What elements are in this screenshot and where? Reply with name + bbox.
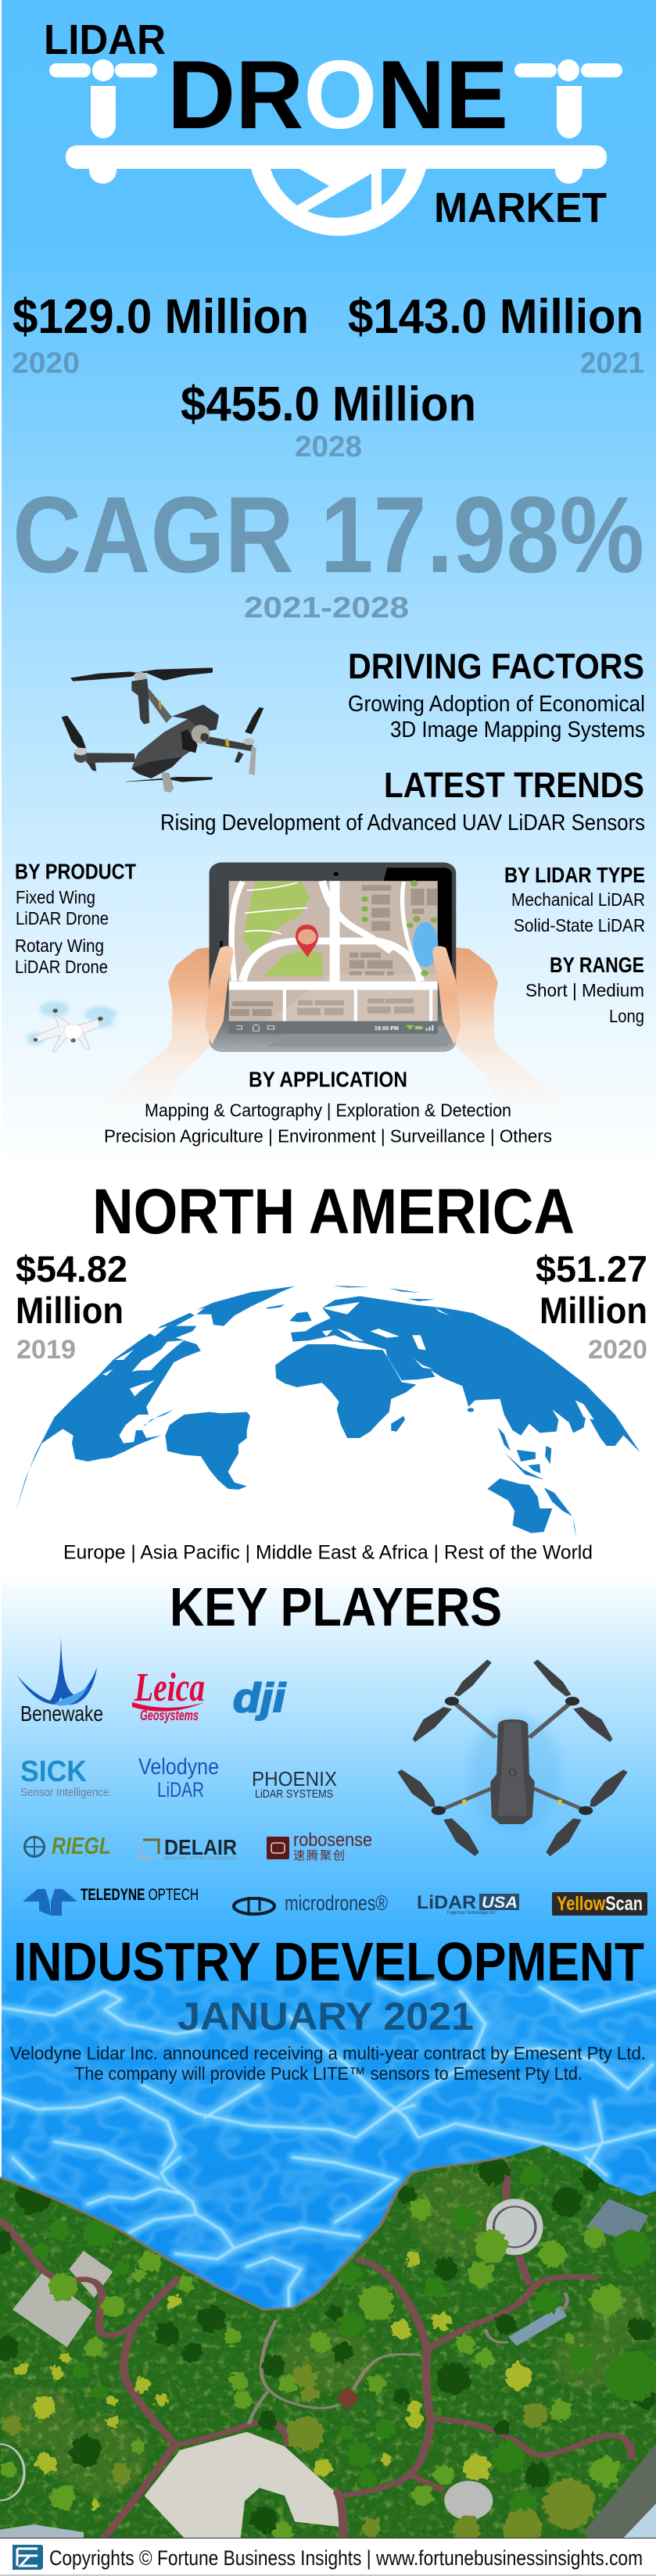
trees	[0, 2156, 656, 2546]
logo: Teledyne Optech	[23, 1886, 199, 1916]
icon: Fortune Business Insights logo	[13, 2545, 43, 2570]
tablet status bar: 19:00 PM	[375, 1025, 399, 1032]
logo: RIEGL	[23, 1832, 111, 1859]
stat: 2019 value: $54.82	[16, 1248, 127, 1290]
item: rotary wing: Rotary Wing	[15, 936, 104, 956]
logo: RoboSense: robosense	[293, 1830, 372, 1851]
logo: Delair: DELAIR	[164, 1835, 237, 1859]
footer bar	[0, 2538, 656, 2576]
date heading: january 2021: JANUARY 2021	[177, 1995, 474, 2038]
logo: Teledyne Optech: TELEDYNE OPTECH	[81, 1886, 199, 1904]
logo: Leica Geosystems	[132, 1665, 205, 1723]
world map globe	[16, 1286, 640, 1538]
drone top view illustration	[397, 1659, 628, 1856]
stat: 2020 year: 2020	[12, 347, 80, 380]
item: mechanical lidar: Mechanical LiDAR	[511, 889, 645, 910]
logo: YellowScan: YellowScan	[557, 1893, 643, 1915]
logo: LiDAR USA	[417, 1892, 519, 1916]
aerial photo: park island	[0, 2141, 656, 2546]
stat: 2020 value: $51.27	[536, 1248, 647, 1290]
park paths	[0, 2165, 632, 2538]
title word: MARKET: MARKET	[434, 184, 607, 231]
key players section	[17, 1576, 647, 1916]
by application segment	[104, 1068, 552, 1147]
logo: Velodyne LiDAR: LiDAR	[157, 1778, 204, 1801]
regional section: north america	[16, 1176, 647, 1563]
logo: Velodyne LiDAR	[138, 1755, 219, 1801]
stat: 2020 unit: Million	[539, 1290, 647, 1331]
sea wall	[0, 2157, 506, 2309]
other regions list: Europe | Asia Pacific | Middle East & Africa | Rest of the World	[63, 1541, 593, 1563]
logo: SICK: Sensor Intelligence.	[20, 1786, 112, 1799]
icon: right arm and hand	[444, 947, 596, 1123]
map screen	[229, 880, 438, 1021]
logo: RoboSense	[267, 1830, 372, 1862]
logo: RoboSense: 速腾聚创	[293, 1849, 345, 1862]
logo: SICK	[20, 1755, 112, 1799]
stat: 2019 year: 2019	[16, 1335, 76, 1365]
latest trends text	[160, 765, 645, 835]
plazas and buildings	[0, 2199, 656, 2538]
item: fixed wing line 2: LiDAR Drone	[16, 908, 109, 928]
stat: 2021 value: $143.0 Million	[348, 290, 643, 344]
icon: small white drone	[27, 1001, 117, 1053]
stat: 2028 year: 2028	[295, 431, 362, 463]
left white edge strip	[0, 0, 2, 2177]
by product segment	[15, 860, 136, 977]
logo: Benewake	[17, 1636, 103, 1726]
logo: LiDAR USA: USA	[482, 1894, 518, 1912]
logo: Velodyne LiDAR: Velodyne	[138, 1755, 219, 1780]
logo: LiDAR USA: LiDAR	[417, 1892, 476, 1913]
heading: north america: NORTH AMERICA	[92, 1176, 575, 1247]
stat: 2028 value: $455.0 Million	[181, 377, 476, 431]
by range segment	[525, 953, 644, 1026]
heading: key players: KEY PLAYERS	[170, 1576, 502, 1637]
logo: Delair	[140, 1835, 238, 1861]
logo: Phoenix LiDAR Systems: PHOENIX	[252, 1767, 337, 1791]
stat: 2019 unit: Million	[16, 1290, 124, 1331]
heading: by application: BY APPLICATION	[249, 1068, 407, 1092]
icon: stylised white drone	[49, 59, 622, 236]
logo: Benewake: Benewake	[20, 1701, 103, 1726]
logo: Leica Geosystems: Geosystems	[140, 1708, 199, 1723]
market size statistics	[12, 290, 644, 624]
logo: Microdrones: microdrones®	[285, 1891, 388, 1915]
stat: 2021 year: 2021	[580, 347, 644, 380]
development description line 1: Velodyne Lidar Inc. announced receiving a multi-year contract by Emesent Pty Ltd.	[10, 2043, 646, 2063]
logo: Phoenix LiDAR Systems: LiDAR SYSTEMS	[255, 1787, 333, 1801]
item: solid-state lidar: Solid-State LiDAR	[514, 915, 645, 936]
title word: DRONE: DRONE	[167, 41, 508, 149]
thumbs over tablet	[205, 946, 234, 1045]
item: long: Long	[609, 1006, 644, 1026]
tablet status bar	[229, 1021, 438, 1034]
grass patches	[0, 2170, 648, 2496]
icon: map pin	[296, 925, 318, 957]
background: top gradient	[0, 0, 656, 1172]
heading: by product: BY PRODUCT	[15, 860, 136, 883]
stat: 2020 year: 2020	[588, 1335, 647, 1365]
logo: Phoenix LiDAR Systems	[252, 1767, 337, 1801]
items: application line 1: Mapping & Cartography | Exploration & Detection	[145, 1100, 511, 1121]
logo: RIEGL: RIEGL	[52, 1832, 111, 1859]
stat: CAGR period: 2021-2028	[244, 592, 409, 624]
logo: SICK: SICK	[20, 1755, 88, 1788]
title block with drone graphic	[44, 16, 622, 236]
development description line 2: The company will provide Puck LITE™ sensors to Emesent Pty Ltd.	[74, 2063, 583, 2084]
drone photo illustration	[62, 667, 263, 792]
title word: LIDAR: LIDAR	[44, 16, 166, 63]
logo: Leica Geosystems: Leica	[134, 1665, 205, 1710]
logo: Delair: AERIAL INTELLIGENCE	[164, 1856, 238, 1861]
by lidar type segment	[504, 863, 645, 936]
stat: 2020 value: $129.0 Million	[13, 290, 309, 344]
logo: LiDAR USA: Fagerman Technologies Inc.	[447, 1911, 496, 1916]
icon: left arm and hand	[70, 947, 222, 1123]
aerial photo: water surface with caustics	[0, 1981, 656, 2538]
tablet held in hands illustration	[70, 863, 596, 1123]
development text block	[10, 1995, 646, 2084]
logo: DJI: dji	[233, 1676, 287, 1721]
item: rotary wing line 2: LiDAR Drone	[15, 957, 108, 977]
items: short and medium: Short | Medium	[525, 980, 644, 1000]
item: fixed wing: Fixed Wing	[16, 887, 95, 907]
background: key players gradient	[0, 1571, 656, 1985]
logo: Microdrones	[234, 1891, 388, 1916]
items: application line 2: Precision Agriculture | Environment | Surveillance | Others	[104, 1126, 552, 1147]
driving factors text	[348, 646, 645, 742]
icon: tablet frame	[210, 863, 456, 1052]
